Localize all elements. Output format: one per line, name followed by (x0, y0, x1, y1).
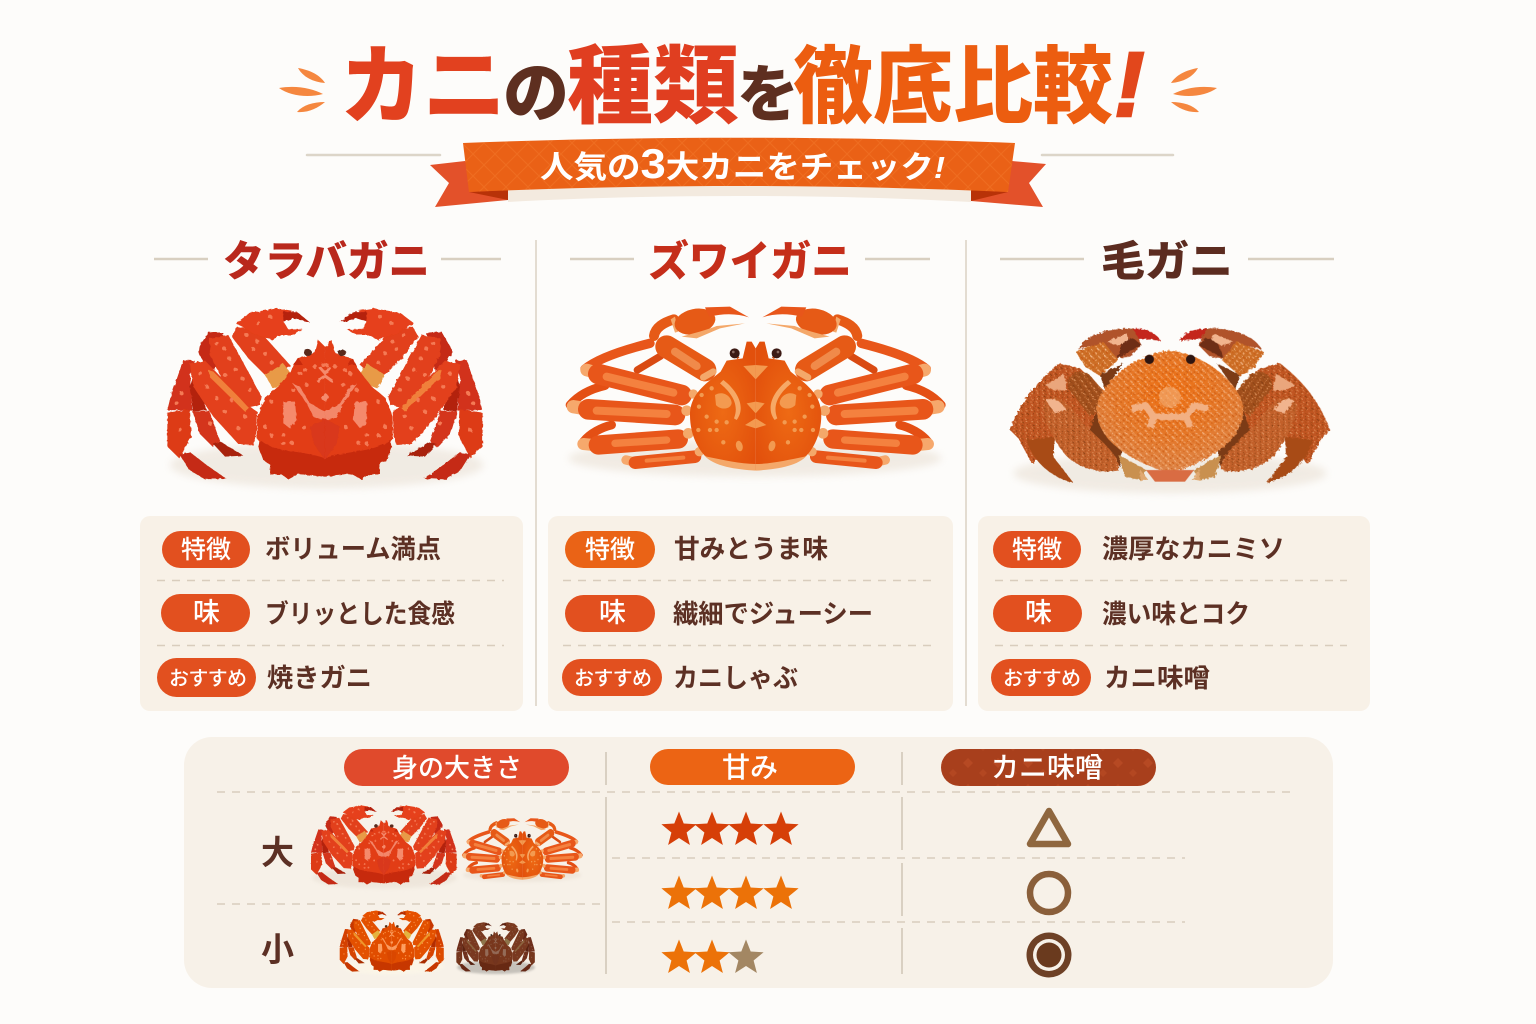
title: の (503, 56, 569, 130)
label: 大: 大 (261, 834, 294, 871)
size: large crabs (311, 805, 582, 889)
tag: おすすめ (157, 658, 256, 697)
ribbon banner (430, 138, 1046, 207)
title: を (737, 61, 799, 130)
tag: 特徴: 特徴 (585, 536, 635, 564)
title: カニ (340, 39, 506, 135)
illustration: snow crab (568, 305, 942, 477)
tag: 味: 味 (599, 598, 626, 628)
rating: stars row 1 (661, 812, 799, 845)
illustration: hair crab (1010, 328, 1330, 493)
text: taste: ブリッとした食感 (265, 599, 455, 629)
tag: 味 (161, 594, 250, 632)
panel: タラバガニ details (140, 516, 523, 711)
banner text: 人気の3大カニをチェック ! (540, 140, 945, 187)
label: 小: 小 (261, 931, 294, 968)
symbol: circle (1030, 874, 1068, 912)
tag: 特徴: 特徴 (1012, 536, 1062, 564)
rating: stars row 2 (661, 876, 799, 909)
text: recommendation: カニしゃぶ (673, 663, 798, 693)
tag: 味: 味 (193, 598, 220, 628)
subtitle side lines (307, 154, 1173, 156)
text: feature: 濃厚なカニミソ (1102, 534, 1285, 564)
rating: stars row 3 (661, 940, 764, 973)
panel: 毛ガニ details (978, 516, 1370, 711)
tag: おすすめ: おすすめ (574, 668, 652, 690)
header: カニ味噌 (941, 749, 1156, 786)
title: ! (1114, 34, 1145, 136)
tag: 特徴: 特徴 (181, 536, 231, 564)
text: recommendation: カニ味噌 (1104, 663, 1210, 693)
column dividers (536, 240, 966, 706)
heading: タラバガニ: タラバガニ (223, 238, 430, 285)
tag: おすすめ (991, 659, 1091, 696)
tag: 味 (993, 595, 1082, 632)
header: 甘み: 甘み (722, 752, 778, 783)
text: taste: 濃い味とコク (1102, 599, 1250, 629)
title: 種類 (567, 39, 739, 135)
header: 甘み (650, 749, 855, 785)
tag: おすすめ: おすすめ (1003, 668, 1081, 690)
heading: ズワイガニ: ズワイガニ (648, 238, 852, 285)
tag: 特徴 (993, 531, 1081, 568)
heading: 毛ガニ: 毛ガニ (1101, 238, 1233, 285)
text: feature: ボリューム満点 (265, 534, 441, 564)
header: カニ味噌: カニ味噌 (991, 752, 1103, 783)
header: 身の大きさ: 身の大きさ (392, 753, 522, 783)
panel: comparison table (184, 737, 1333, 988)
illustration: king crab (167, 308, 483, 488)
symbol: double circle (1026, 932, 1072, 978)
panel: ズワイガニ details (548, 516, 953, 711)
symbol: triangle (1030, 811, 1068, 844)
icon: right sparks (1171, 68, 1217, 112)
tag: 特徴 (162, 531, 250, 568)
title: 徹底比較 (793, 40, 1113, 134)
title (340, 34, 1145, 136)
tag: 味 (565, 595, 655, 632)
icon: left sparks (279, 68, 325, 112)
text: taste: 繊細でジューシー (673, 599, 873, 629)
header: 身の大きさ (344, 749, 569, 786)
text: feature: 甘みとうま味 (674, 534, 828, 564)
size: small crabs (340, 911, 535, 975)
tag: 味: 味 (1025, 598, 1052, 628)
tag: 特徴 (565, 531, 655, 568)
tag: おすすめ: おすすめ (169, 668, 247, 690)
tag: おすすめ (562, 659, 662, 696)
text: recommendation: 焼きガニ (267, 663, 372, 693)
